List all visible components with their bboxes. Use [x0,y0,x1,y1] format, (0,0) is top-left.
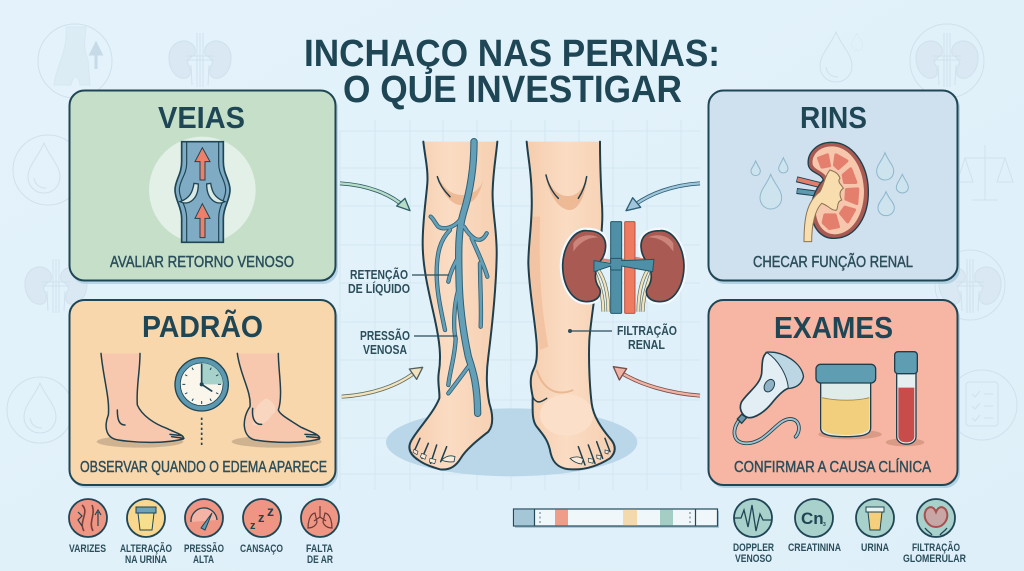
icon: varizes: VARIZES [69,543,106,555]
color strip [514,509,719,528]
central illustration: legs [340,142,700,476]
panel: padrao [70,300,338,488]
icon: falta de ar [301,499,339,566]
title [304,33,720,111]
icon: cansaco: z [267,503,274,519]
heading: rins: RINS [800,100,867,135]
icon: doppler venoso: VENOSO [735,553,772,565]
icon: filtracao glomerular [903,499,966,565]
icon: urina [856,499,894,554]
text: avaliar retorno venoso: AVALIAR RETORNO VENOSO [110,254,294,271]
icon: falta de ar: DE AR [307,554,333,566]
text: confirmar a causa clinica: CONFIRMAR A CAUSA CLÍNICA [734,457,931,476]
callout: pressao venosa: PRESSÃO [360,328,410,343]
heading: veias: VEIAS [158,100,245,135]
kidneys with vessels [563,222,684,313]
floor shadow [386,408,637,476]
title: O QUE INVESTIGAR [343,69,682,111]
text: checar funcao renal: CHECAR FUNÇÃO RENAL [753,251,913,271]
exam icons row [733,499,966,565]
right leg with swollen ankle [527,142,615,469]
icon: pressao alta: ALTA [193,554,214,566]
icon: creatinina: Cn [801,509,824,528]
icon: kidney cross-section with drops [751,142,908,242]
icon: alteracao na urina [120,499,172,566]
callout: retencao de liquido [348,267,449,296]
callout: retencao de liquido: RETENÇÃO [350,267,408,282]
panel: rins [708,90,960,284]
symptom icons row [69,499,339,566]
arrow: exames to leg [613,367,700,396]
icon: creatinina: 3 [823,522,826,528]
background grid [340,120,700,490]
callout: filtracao renal [568,323,677,352]
icon: cansaco: z [250,520,256,532]
left leg with varicose veins [409,142,497,470]
panel: exames [708,300,960,488]
icon: alteracao na urina: NA URINA [125,554,167,566]
icon: normal and swollen feet with clock [97,353,322,448]
text: observar quando o edema aparece: OBSERVAR QUANDO O EDEMA APARECE [80,459,327,476]
callout: retencao de liquido: DE LÍQUIDO [348,281,410,296]
icon: doppler venoso: DOPPLER [733,542,774,554]
arrow: rins to leg [626,183,700,211]
icon: doppler venoso [733,499,774,565]
icon: falta de ar: FALTA [306,543,333,555]
icon: ultrasound probe, urine cup, blood tube [734,352,924,446]
icon: cansaco [240,499,283,555]
icon: urina: URINA [861,542,889,554]
watermark icons [7,24,1017,443]
icon: alteracao na urina: ALTERAÇÃO [120,542,172,555]
heading: padrao: PADRÃO [142,309,263,344]
callout: pressao venosa: VENOSA [363,343,407,357]
icon: varizes [69,499,107,555]
icon: pressao alta: PRESSÃO [184,542,224,555]
icon: creatinina [788,499,841,554]
title: INCHAÇO NAS PERNAS: [304,33,720,75]
heading: exames: EXAMES [774,310,893,345]
icon: creatinina: CREATININA [788,542,841,554]
callout: pressao venosa [360,328,457,357]
icon: cansaco: z [258,510,265,525]
icon: filtracao glomerular: GLOMERULAR [903,553,966,565]
icon: filtracao glomerular: FILTRAÇÃO [912,541,960,554]
arrow: padrao to leg [342,367,423,397]
arrow: veias to leg [340,183,410,211]
icon: pressao alta [184,499,224,566]
panel: veias [70,90,338,284]
callout: filtracao renal: FILTRAÇÃO [617,323,677,338]
callout: filtracao renal: RENAL [628,338,665,352]
icon: vein with valves [149,137,256,243]
icon: cansaco: CANSAÇO [240,543,283,555]
